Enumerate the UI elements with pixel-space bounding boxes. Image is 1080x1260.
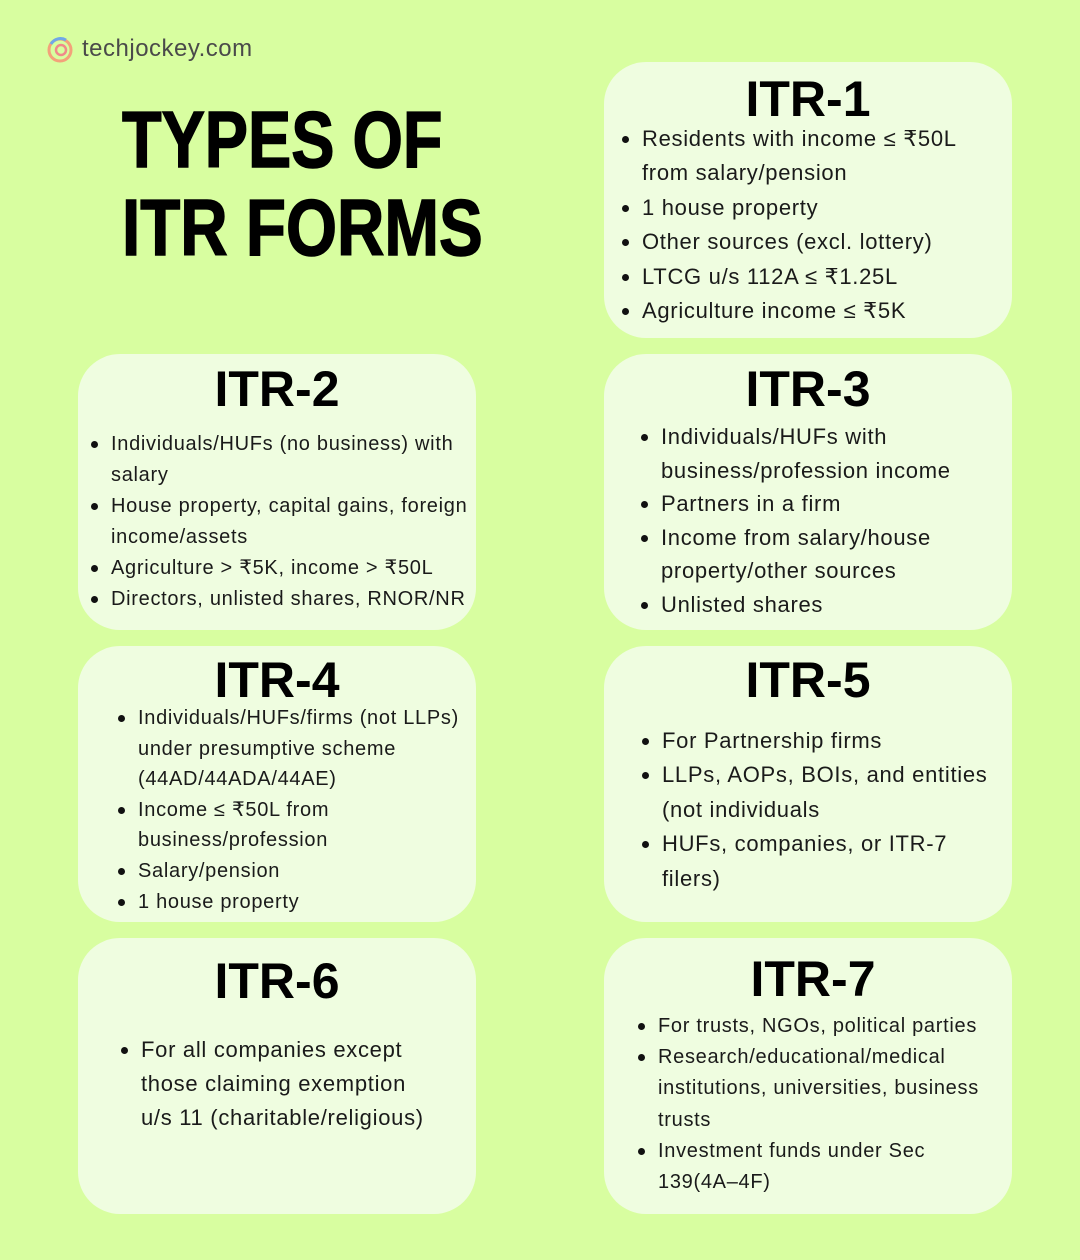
panel: ITR-2: [78, 354, 476, 630]
panel: ITR-1: [604, 62, 1012, 338]
panel: ITR-1: Residents with income ≤ ₹50L: [642, 126, 957, 151]
panel: ITR-3: Unlisted shares: [661, 592, 823, 616]
heading ITR-4: ITR-4: [214, 652, 340, 708]
panel: ITR-1: LTCG u/s 112A ≤ ₹1.25L: [642, 264, 898, 289]
panel: ITR-7: trusts: [658, 1109, 711, 1131]
panel: ITR-6: For all companies except: [141, 1037, 402, 1062]
panel: ITR-5: LLPs, AOPs, BOIs, and entities: [662, 762, 988, 787]
panel: ITR-4: Salary/pension: [138, 860, 280, 882]
panel: ITR-3: Income from salary/house: [661, 524, 931, 550]
panel: ITR-3: Individuals/HUFs with: [661, 424, 887, 449]
panel: ITR-3: [604, 354, 1012, 630]
panel: ITR-2: Directors, unlisted shares, RNOR/NR: [111, 588, 466, 610]
heading ITR-5: ITR-5: [746, 652, 870, 708]
panel: ITR-6: those claiming exemption: [141, 1071, 406, 1096]
panel: ITR-2: income/assets: [111, 526, 248, 548]
panel: ITR-5: filers): [662, 866, 721, 891]
panel: ITR-6: u/s 11 (charitable/religious): [141, 1105, 424, 1130]
heading ITR-3: ITR-3: [746, 361, 870, 417]
title: ITR FORMS: [122, 183, 483, 272]
panel: ITR-4: 1 house property: [138, 891, 299, 913]
panel: ITR-7: Research/educational/medical: [658, 1046, 946, 1068]
panel: ITR-7: [604, 938, 1012, 1214]
panel: ITR-1: 1 house property: [642, 195, 818, 220]
panel: ITR-3: Partners in a firm: [661, 491, 841, 516]
panel: ITR-4: (44AD/44ADA/44AE): [138, 768, 337, 790]
panel: ITR-1: Other sources (excl. lottery): [642, 229, 932, 254]
title: [122, 95, 483, 272]
panel: ITR-5: For Partnership firms: [662, 728, 882, 753]
panel: ITR-5: [604, 646, 1012, 922]
panel: ITR-1: from salary/pension: [642, 160, 847, 185]
heading ITR-7: ITR-7: [750, 951, 876, 1007]
panel: ITR-7: For trusts, NGOs, political parties: [658, 1015, 977, 1037]
icon: logo ring: [48, 37, 72, 62]
panel: ITR-1: Agriculture income ≤ ₹5K: [642, 298, 906, 323]
panel: ITR-7: Investment funds under Sec: [658, 1140, 925, 1162]
panel: ITR-5: (not individuals: [662, 797, 820, 822]
panel: ITR-4: Individuals/HUFs/firms (not LLPs): [138, 707, 459, 729]
panel: ITR-4: [78, 646, 476, 922]
panel: ITR-2: House property, capital gains, foreign: [111, 495, 467, 517]
panel: ITR-4: business/profession: [138, 829, 328, 851]
heading ITR-2: ITR-2: [214, 361, 340, 417]
panel: ITR-4: under presumptive scheme: [138, 738, 396, 760]
panel: ITR-4: Income ≤ ₹50L from: [138, 799, 329, 821]
panel: ITR-3: property/other sources: [661, 558, 897, 583]
panel: ITR-3: business/profession income: [661, 458, 951, 482]
panel: ITR-6: [78, 938, 476, 1214]
panel: ITR-7: institutions, universities, business: [658, 1077, 979, 1099]
title: TYPES OF: [122, 95, 442, 184]
panel: ITR-5: HUFs, companies, or ITR-7: [662, 831, 947, 856]
heading ITR-6: ITR-6: [214, 953, 340, 1009]
logo: techjockey.com: [82, 35, 253, 62]
heading ITR-1: ITR-1: [746, 71, 870, 127]
panel: ITR-7: 139(4A–4F): [658, 1171, 771, 1193]
panel: ITR-2: Agriculture > ₹5K, income > ₹50L: [111, 557, 433, 579]
panel: ITR-2: Individuals/HUFs (no business) with: [111, 433, 453, 455]
panel: ITR-2: salary: [111, 464, 169, 486]
